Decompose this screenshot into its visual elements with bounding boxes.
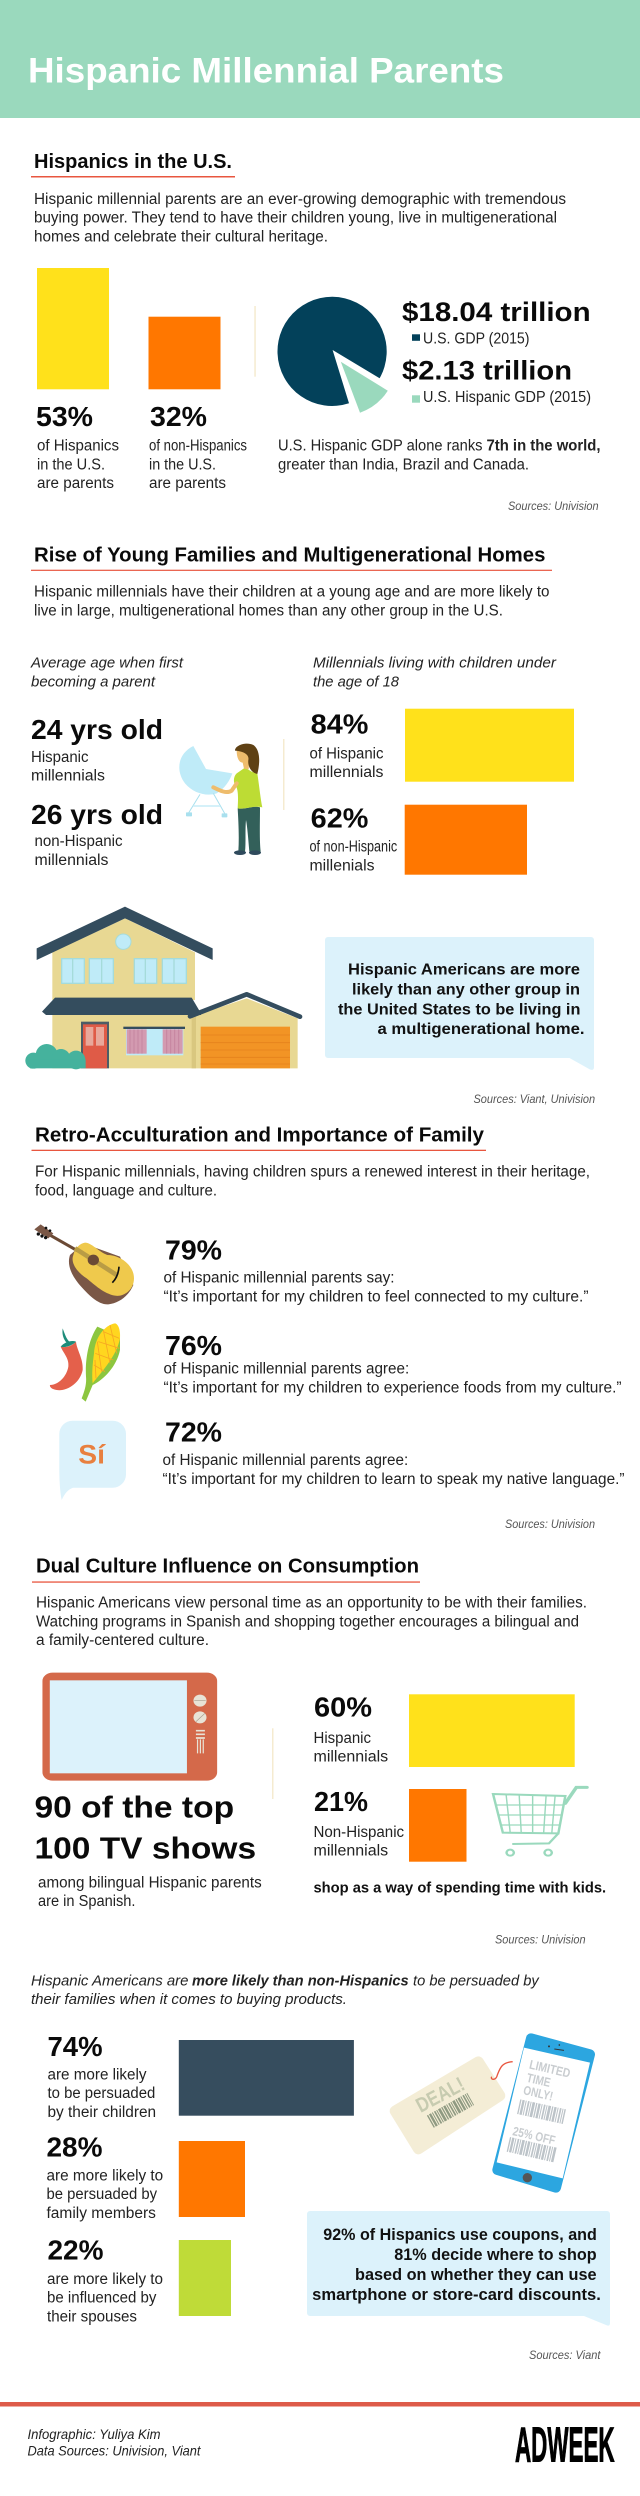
legend: U.S. GDP: $18.04 trillion <box>402 297 591 327</box>
subhead: living with children: the age of 18 <box>313 673 400 690</box>
callout: multigenerational home: a multigenerational home. <box>378 1021 584 1038</box>
source: Sources: Viant, Univision <box>474 1092 595 1106</box>
heading: Rise of Young Families and Multigenerational Homes <box>34 545 545 567</box>
credits: Data Sources: Univision, Viant <box>28 2443 202 2459</box>
legend: U.S. Hispanic GDP: $2.13 trillion <box>402 355 572 385</box>
heading: Hispanics in the U.S. <box>34 151 232 173</box>
stat: 90 of the top 100 TV shows: 100 TV shows <box>34 1830 256 1865</box>
stat: 79%: “It’s important for my children to feel connected to my culture.” <box>164 1288 588 1305</box>
source: Sources: Univision <box>495 1932 586 1946</box>
panel: Rise of Young Families <box>25 545 595 1106</box>
stat: 22% <box>47 2234 163 2325</box>
bar: 22% <box>179 2240 231 2316</box>
GDP note: U.S. Hispanic GDP alone ranks <box>278 438 483 455</box>
stat: 60%: Hispanic <box>314 1730 371 1747</box>
legend: U.S. GDP <box>402 297 591 347</box>
bar: 28% <box>179 2141 245 2217</box>
stat: 60%: 60% <box>314 1692 372 1723</box>
bar: 74% <box>179 2040 354 2116</box>
stat: 74%: to be persuaded <box>48 2085 155 2102</box>
callout: coupons: 81% decide where to shop <box>394 2246 597 2264</box>
icon: television <box>42 1673 217 1781</box>
stat: 21%: Non-Hispanic <box>314 1824 404 1841</box>
intro text: Hispanic millennial parents are an ever-growing demographic with tremendous <box>34 191 566 208</box>
stat: 79%: 79% <box>165 1234 222 1265</box>
callout: coupons: based on whether they can use <box>355 2266 597 2284</box>
icon: woman with stroller <box>179 744 262 855</box>
stat: 84%: 84% <box>311 708 369 739</box>
stat: 60%: millennials <box>314 1749 388 1766</box>
stat: 32%: are parents <box>149 475 226 492</box>
icon: smartphone with coupons: 25% OFF <box>511 2124 557 2148</box>
intro text: food, language and culture. <box>35 1182 217 1199</box>
stat: 28%: 28% <box>46 2132 103 2163</box>
stat: 24 yrs old: Hispanic <box>31 749 89 766</box>
stat: 90 of the top 100 TV shows: are in Spanish. <box>38 1893 136 1910</box>
stat: 72%: of Hispanic millennial parents agree: <box>162 1452 408 1469</box>
stat: 72%: 72% <box>165 1416 222 1447</box>
intro text: to be persuaded by <box>413 1973 540 1990</box>
icon: shopping cart <box>493 1787 587 1856</box>
source: Sources: Viant <box>529 2348 601 2362</box>
stat: 76% <box>164 1330 622 1396</box>
stat: 32% <box>149 401 247 492</box>
callout: coupons: smartphone or store-card discounts. <box>312 2286 601 2304</box>
stat: 76%: “It’s important for my children to experience foods from my culture.” <box>164 1379 622 1396</box>
stat: 74%: 74% <box>48 2031 103 2062</box>
stat: 22%: 22% <box>48 2234 104 2265</box>
callout: multigenerational home: Hispanic Americans are more <box>348 962 580 979</box>
icon: guitar <box>34 1224 134 1304</box>
source: Sources: Univision <box>508 499 599 513</box>
callout: multigenerational home <box>325 937 594 1070</box>
stat: 84%: millennials <box>310 764 384 781</box>
callout: multigenerational home: the United States to be living in <box>338 1001 580 1018</box>
pie chart: GDP <box>277 297 388 413</box>
stat: 60% <box>314 1692 388 1766</box>
GDP note: greater than India, Brazil and Canada. <box>278 456 529 473</box>
panel: persuasion <box>31 1973 610 2362</box>
stat: 79%: of Hispanic millennial parents say: <box>164 1269 394 1286</box>
panel: Retro-Acculturation <box>32 1125 624 1531</box>
icon: chile and corn <box>50 1323 120 1402</box>
stat: 28%: family members <box>46 2205 156 2222</box>
intro text: Hispanic Americans view personal time as an opportunity to be with their families. <box>36 1595 587 1612</box>
heading: Dual Culture Influence on Consumption <box>36 1556 419 1578</box>
stat: 79% <box>164 1234 588 1305</box>
subhead: average age <box>30 654 184 690</box>
stat: 74% <box>48 2031 156 2121</box>
bar: 21% <box>409 1789 466 1862</box>
stat: 53%: of Hispanics <box>37 438 119 455</box>
intro text <box>34 584 550 620</box>
bar: non-Hispanics who are parents <box>148 317 220 389</box>
bar: 84% <box>405 709 574 782</box>
legend: U.S. Hispanic GDP: U.S. Hispanic GDP (2015) <box>423 389 591 406</box>
stat: 84% <box>310 708 384 781</box>
callout: coupons: 92% of Hispanics use coupons, and <box>323 2226 597 2244</box>
stat: 74%: are more likely <box>48 2066 147 2083</box>
stat: 72% <box>162 1416 624 1488</box>
intro text <box>31 1973 540 2008</box>
stat: 21%: millennials <box>314 1843 388 1860</box>
stat: 84%: of Hispanic <box>310 745 384 762</box>
callout: multigenerational home: likely than any other group in <box>352 982 580 999</box>
stat: 24 yrs old <box>31 714 163 785</box>
stat: 62%: millenials <box>310 857 375 874</box>
header banner <box>0 0 640 118</box>
icon: deal tag <box>395 2062 513 2149</box>
stat: 28%: be persuaded by <box>46 2186 157 2203</box>
stat: 53%: are parents <box>37 475 114 492</box>
footer <box>0 2402 640 2473</box>
intro text <box>35 1164 590 1199</box>
icon: smartphone with coupons: TIME <box>525 2071 552 2090</box>
stat: 32%: in the U.S. <box>149 456 216 473</box>
intro text: Hispanic millennials have their children at a young age and are more likely to <box>34 584 550 601</box>
icon: house <box>25 907 300 1069</box>
stat: 28% <box>46 2132 163 2222</box>
stat: 26 yrs old: 26 yrs old <box>31 799 163 830</box>
stat: 26 yrs old <box>31 799 163 869</box>
panel: Hispanics in the U.S. <box>31 151 600 513</box>
intro text: buying power. They tend to have their children young, live in multigenerational <box>34 210 557 227</box>
stat: 62% <box>310 803 397 874</box>
legend: U.S. GDP: U.S. GDP (2015) <box>423 330 530 347</box>
panel: Dual Culture Influence <box>32 1556 606 1946</box>
subhead: living with children: Millennials living with children under <box>313 654 557 671</box>
stat: 76%: 76% <box>165 1330 222 1361</box>
icon: speech bubble Sí <box>59 1421 126 1500</box>
stat: 90 of the top 100 TV shows <box>34 1790 262 1910</box>
heading: Retro-Acculturation and Importance of Family <box>35 1125 485 1147</box>
icon: smartphone with coupons: LIMITED <box>528 2058 572 2081</box>
stat: 62%: 62% <box>311 803 369 834</box>
intro text <box>36 1595 587 1649</box>
stat: 90 of the top 100 TV shows: among bilingual Hispanic parents <box>38 1874 262 1891</box>
bar: 62% <box>405 805 527 875</box>
stat: 32%: of non-Hispanics <box>149 438 247 455</box>
stat: 53% <box>36 401 119 492</box>
stat: 74%: by their children <box>48 2104 156 2121</box>
legend: U.S. Hispanic GDP <box>402 355 591 406</box>
source: Sources: Univision <box>505 1517 595 1531</box>
intro text <box>34 191 566 245</box>
stat: 62%: of non-Hispanic <box>310 839 397 856</box>
credits: Infographic: Yuliya Kim <box>28 2426 161 2442</box>
subhead: average age: becoming a parent <box>31 673 156 690</box>
intro text: more likely than non-Hispanics <box>192 1973 409 1990</box>
stat: 53%: 53% <box>36 401 93 432</box>
subhead: average age: Average age when first <box>30 654 184 671</box>
caption: shop with kids: shop as a way of spending time with kids. <box>314 1880 606 1897</box>
stat: 28%: are more likely to <box>46 2167 163 2184</box>
icon: smartphone with coupons: ONLY! <box>522 2083 554 2104</box>
stat: 24 yrs old: 24 yrs old <box>31 714 163 745</box>
stat: 21%: 21% <box>314 1786 368 1817</box>
intro text: homes and celebrate their cultural heritage. <box>34 228 328 245</box>
stat: 90 of the top 100 TV shows: 90 of the top <box>34 1790 234 1825</box>
GDP note: 7th in the world, <box>486 438 600 455</box>
icon: deal tag: DEAL! <box>412 2073 469 2117</box>
stat: 26 yrs old: non-Hispanic <box>34 833 123 850</box>
intro text: Watching programs in Spanish and shopping together encourages a bilingual and <box>36 1613 579 1630</box>
stat: 26 yrs old: millennials <box>34 852 109 869</box>
stat: 24 yrs old: millennials <box>31 768 105 785</box>
subhead: living with children <box>313 654 557 690</box>
icon: speech bubble Sí: Sí <box>78 1439 107 1469</box>
stat: 76%: of Hispanic millennial parents agree: <box>164 1360 409 1377</box>
intro text: live in large, multigenerational homes than any other group in the U.S. <box>34 603 503 620</box>
intro text: a family-centered culture. <box>36 1632 209 1649</box>
stat: 53%: in the U.S. <box>37 456 105 473</box>
credits <box>28 2426 202 2459</box>
bar: 60% <box>409 1694 575 1767</box>
intro text: For Hispanic millennials, having children spurs a renewed interest in their heritage, <box>35 1164 590 1181</box>
stat: 22%: be influenced by <box>47 2290 157 2307</box>
stat: 22%: their spouses <box>47 2308 137 2325</box>
intro text: Hispanic Americans are <box>31 1973 188 1990</box>
stat: 32%: 32% <box>150 401 207 432</box>
intro text: their families when it comes to buying products. <box>31 1991 347 2008</box>
stat: 22%: are more likely to <box>47 2271 163 2288</box>
icon: smartphone with coupons <box>497 2038 590 2188</box>
bar: Hispanics who are parents <box>37 268 109 389</box>
callout: coupons <box>307 2211 610 2326</box>
title: Hispanic Millennial Parents <box>28 52 504 91</box>
stat: 21% <box>314 1786 404 1860</box>
GDP note <box>278 438 600 473</box>
stat: 72%: “It’s important for my children to learn to speak my native language.” <box>162 1471 624 1488</box>
